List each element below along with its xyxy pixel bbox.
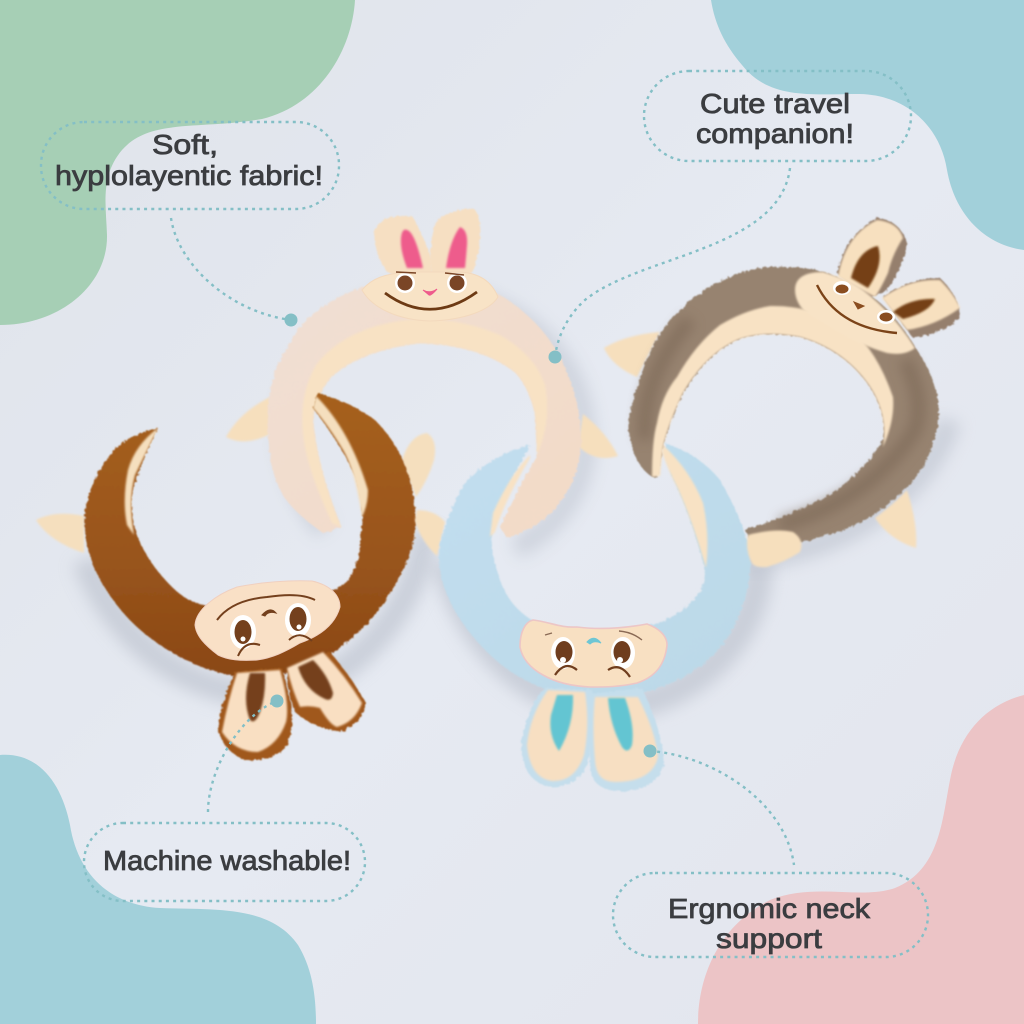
face	[362, 272, 498, 321]
icon: beige side ear left	[226, 397, 270, 441]
teal inner ear right	[608, 698, 633, 751]
callout outline	[613, 873, 928, 957]
callout text: Ergnomic neck	[668, 893, 871, 924]
leader line	[555, 168, 790, 357]
icon: taupe side ear left	[604, 332, 660, 377]
leader line	[650, 751, 794, 865]
blob: green top left	[0, 0, 355, 325]
brown inner ear left	[246, 673, 265, 721]
left ear cream	[222, 670, 287, 752]
band cream lining	[302, 319, 547, 527]
callout: machine washable	[84, 694, 365, 901]
callout: travel companion	[548, 71, 911, 364]
left ear fur	[219, 668, 292, 760]
up ear fur	[837, 218, 907, 298]
brown inner ear up	[851, 246, 880, 288]
callout: ergonomic neck support	[613, 744, 928, 957]
ears	[521, 688, 664, 791]
right ear fur	[589, 688, 664, 791]
callout text: Machine washable!	[103, 845, 351, 876]
callout: soft fabric	[41, 122, 339, 326]
taupe shadow	[740, 420, 950, 560]
icon: beige side ear right	[578, 414, 618, 458]
callout outline	[644, 71, 911, 161]
band fur	[439, 443, 750, 698]
left ear fur	[521, 688, 593, 787]
right ear cream	[287, 652, 362, 727]
callout: ergonomic neck support: support	[716, 923, 822, 954]
leader dot	[644, 744, 656, 758]
callout text: Cute travel	[700, 88, 850, 119]
icon: brown side ear left	[36, 514, 84, 553]
right ear cream	[882, 280, 960, 330]
band fur	[85, 393, 416, 678]
leader line	[171, 218, 291, 320]
callout outline	[84, 823, 365, 901]
leader dot	[270, 694, 284, 708]
teal inner ear left	[550, 695, 573, 751]
callout: travel companion: companion!	[696, 118, 854, 149]
band fur	[268, 276, 581, 538]
ears	[219, 652, 366, 760]
beige shadow	[288, 293, 585, 548]
headband: brown	[36, 393, 435, 760]
band cream lining	[125, 428, 158, 535]
leader dot	[284, 314, 298, 326]
up ear cream	[838, 220, 903, 297]
band cream lining	[490, 455, 530, 537]
left ear cream	[527, 690, 587, 781]
face features	[385, 272, 477, 309]
icon: blue side ear right	[747, 531, 801, 567]
headband: taupe	[604, 218, 960, 560]
rabbit ears	[374, 208, 480, 290]
callout: soft fabric: hyplolayentic fabric!	[55, 160, 323, 191]
band darker core	[645, 320, 918, 525]
brown shadow	[85, 530, 425, 695]
rabbit ears	[837, 218, 960, 338]
face features	[217, 595, 315, 656]
right ear cream	[594, 697, 658, 782]
band cream lining	[652, 306, 893, 477]
leader dot	[548, 350, 562, 364]
face	[520, 620, 667, 687]
pink inner ear right	[446, 227, 467, 268]
blob: pink bottom right	[698, 695, 1024, 1024]
callout text: Soft,	[152, 129, 218, 160]
face features	[817, 281, 897, 333]
headband: beige	[226, 208, 618, 548]
face	[195, 581, 340, 660]
blob: teal top right	[711, 0, 1024, 250]
band fur	[628, 267, 939, 548]
right ear	[430, 208, 480, 280]
blue shadow	[445, 560, 758, 708]
headband: blue	[415, 443, 801, 791]
leader line	[208, 701, 277, 812]
face	[795, 272, 915, 354]
left ear	[374, 216, 432, 290]
right ear fur	[883, 278, 960, 338]
icon: taupe side ear bottom	[875, 490, 916, 548]
face features	[545, 631, 642, 677]
icon: blue side ear left	[415, 510, 445, 556]
pink inner ear left	[401, 230, 423, 268]
blob: teal bottom left	[0, 755, 316, 1024]
brown inner ear right	[298, 660, 333, 700]
right ear fur	[287, 652, 366, 731]
callout outline	[41, 122, 339, 209]
icon: brown side ear right	[402, 433, 435, 497]
brown inner ear right	[893, 299, 935, 319]
